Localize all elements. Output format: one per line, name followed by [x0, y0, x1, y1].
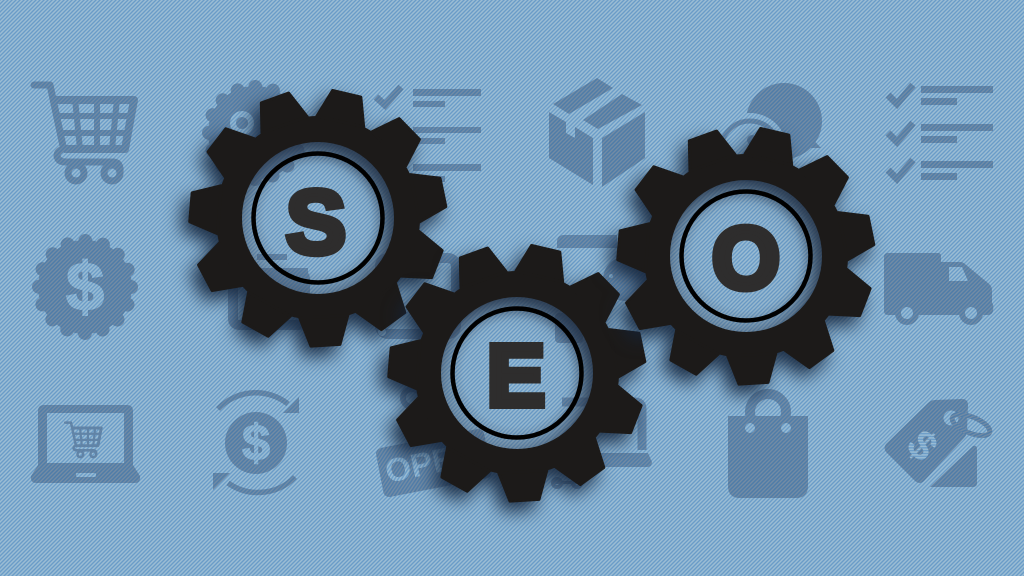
- gear hole ring O: [670, 180, 822, 332]
- gear hole ring E: [441, 297, 593, 449]
- icon: dollar coin with circular arrows: $: [242, 415, 270, 471]
- icon: laptop with cart: [31, 405, 140, 483]
- icon: checklist right: [888, 85, 993, 180]
- icon: price tag: [884, 399, 993, 487]
- gear E: [388, 243, 647, 502]
- icon: shopping bag: [728, 394, 808, 498]
- icon: dollar badge: [38, 240, 132, 334]
- icon: dollar badge: $: [66, 249, 104, 325]
- ring outline E: [452, 308, 582, 438]
- gear body E: [388, 243, 647, 502]
- icon: speech bubbles: [713, 83, 822, 187]
- icon: laptop behind E gear: [540, 402, 652, 487]
- icon: price tag: $: [898, 420, 948, 470]
- letter S: S: [286, 173, 346, 273]
- gear body O: [617, 126, 876, 385]
- icon: dollar coin with circular arrows: [213, 393, 299, 493]
- icon: open sign: OPEN: [382, 434, 481, 490]
- ring outline O: [682, 192, 810, 320]
- icon: percent badge behind S gear: [208, 86, 302, 180]
- icon: checklist behind S gear: [376, 87, 481, 182]
- letter E: E: [487, 328, 545, 424]
- ring outline S: [254, 154, 382, 282]
- gear S: [189, 88, 448, 347]
- gear hole ring S: [242, 142, 394, 294]
- icon: open sign: [375, 389, 493, 498]
- icon: device behind S gear: [233, 254, 308, 325]
- letter O: O: [712, 210, 780, 307]
- icon: box: [549, 78, 645, 187]
- gear body S: [189, 88, 448, 347]
- icon: device between S and E gears: [378, 258, 456, 336]
- icon: shopping cart: [34, 85, 134, 181]
- icon: delivery truck: [884, 253, 993, 325]
- gear O: [617, 126, 876, 385]
- icon: monitor behind E and O gears: [555, 235, 647, 343]
